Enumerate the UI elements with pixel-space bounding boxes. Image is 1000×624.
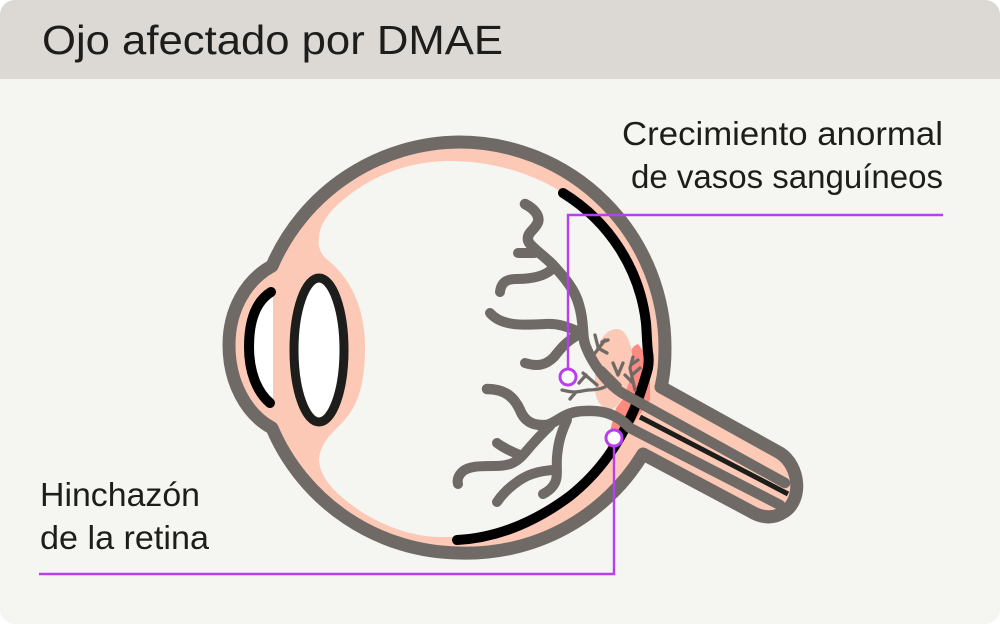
- header band: [0, 0, 1000, 79]
- retinal swelling: peach bulge: [595, 329, 632, 409]
- lower blood vessels: [458, 389, 780, 505]
- optic nerve black core: [640, 417, 788, 494]
- callout line: retinal swelling: [39, 447, 614, 574]
- label: retinal swelling: Hinchazón: [40, 476, 200, 513]
- retina: [457, 193, 649, 540]
- callout line: abnormal vessel growth: [568, 215, 943, 369]
- retinal swelling: salmon fluid: [608, 344, 650, 456]
- eye wall: sclera, cornea and optic nerve outline: [229, 142, 797, 553]
- upper blood vessels: [490, 204, 785, 483]
- lens: [294, 278, 344, 422]
- marker: retinal swelling: [606, 430, 622, 446]
- title: Ojo afectado por DMAE: [42, 17, 503, 63]
- label: retinal swelling: [40, 476, 210, 556]
- diagram: eye cross-section: [39, 142, 943, 574]
- label: retinal swelling: de la retina: [40, 519, 210, 556]
- cornea inner arc: [249, 292, 271, 403]
- label: abnormal vessel growth: Crecimiento anormal: [622, 115, 943, 152]
- vitreous chamber: [319, 161, 649, 537]
- label: abnormal vessel growth: de vasos sanguíneos: [631, 158, 943, 195]
- cornea white chamber: [250, 296, 273, 405]
- new abnormal vessel branches: [562, 335, 640, 399]
- marker: abnormal vessel growth: [560, 369, 576, 385]
- label: abnormal vessel growth: [622, 115, 943, 195]
